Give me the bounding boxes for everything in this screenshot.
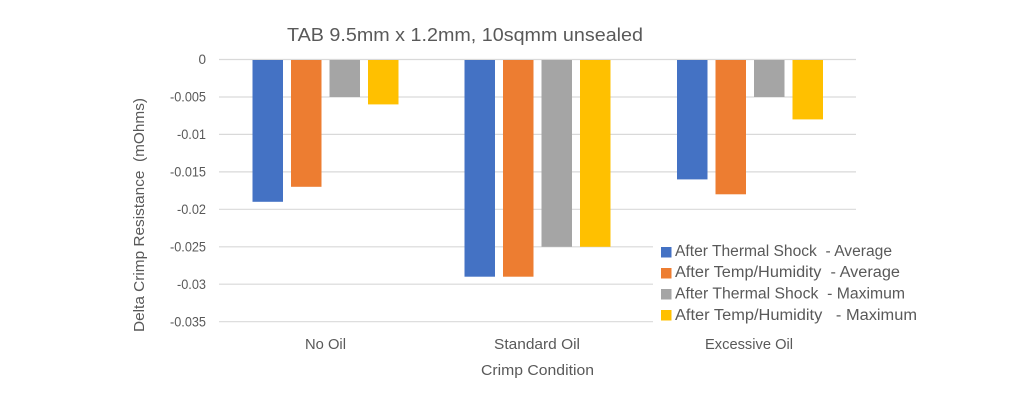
y axis title: Delta Crimp Resistance (mOhms) bbox=[132, 98, 148, 332]
category labels: No Oil bbox=[305, 337, 346, 353]
y axis labels: -0.01 bbox=[177, 127, 206, 142]
y axis labels: -0.025 bbox=[170, 240, 206, 254]
legend: After Thermal Shock - Maximum bbox=[675, 286, 905, 302]
bars: No Oil bbox=[252, 60, 398, 202]
bars: Excessive Oil bbox=[677, 60, 823, 194]
title: TAB 9.5mm x 1.2mm, 10sqmm unsealed bbox=[287, 24, 643, 45]
legend: After Temp/Humidity - Average bbox=[675, 264, 900, 281]
y axis labels bbox=[170, 52, 206, 330]
legend: After Temp/Humidity - Maximum bbox=[675, 307, 917, 324]
legend: After Thermal Shock - Average bbox=[675, 243, 892, 260]
y axis labels: -0.02 bbox=[177, 202, 206, 217]
legend bbox=[661, 243, 917, 324]
x axis title: Crimp Condition bbox=[481, 363, 594, 379]
y axis labels: 0 bbox=[198, 52, 206, 67]
y axis labels: -0.035 bbox=[170, 314, 206, 330]
category labels bbox=[305, 337, 793, 353]
y axis labels: -0.03 bbox=[177, 277, 206, 292]
category labels: Excessive Oil bbox=[705, 337, 793, 353]
y axis labels: -0.015 bbox=[170, 164, 206, 180]
category labels: Standard Oil bbox=[494, 337, 580, 353]
bars: Standard Oil bbox=[464, 60, 610, 277]
y axis labels: -0.005 bbox=[170, 90, 206, 104]
